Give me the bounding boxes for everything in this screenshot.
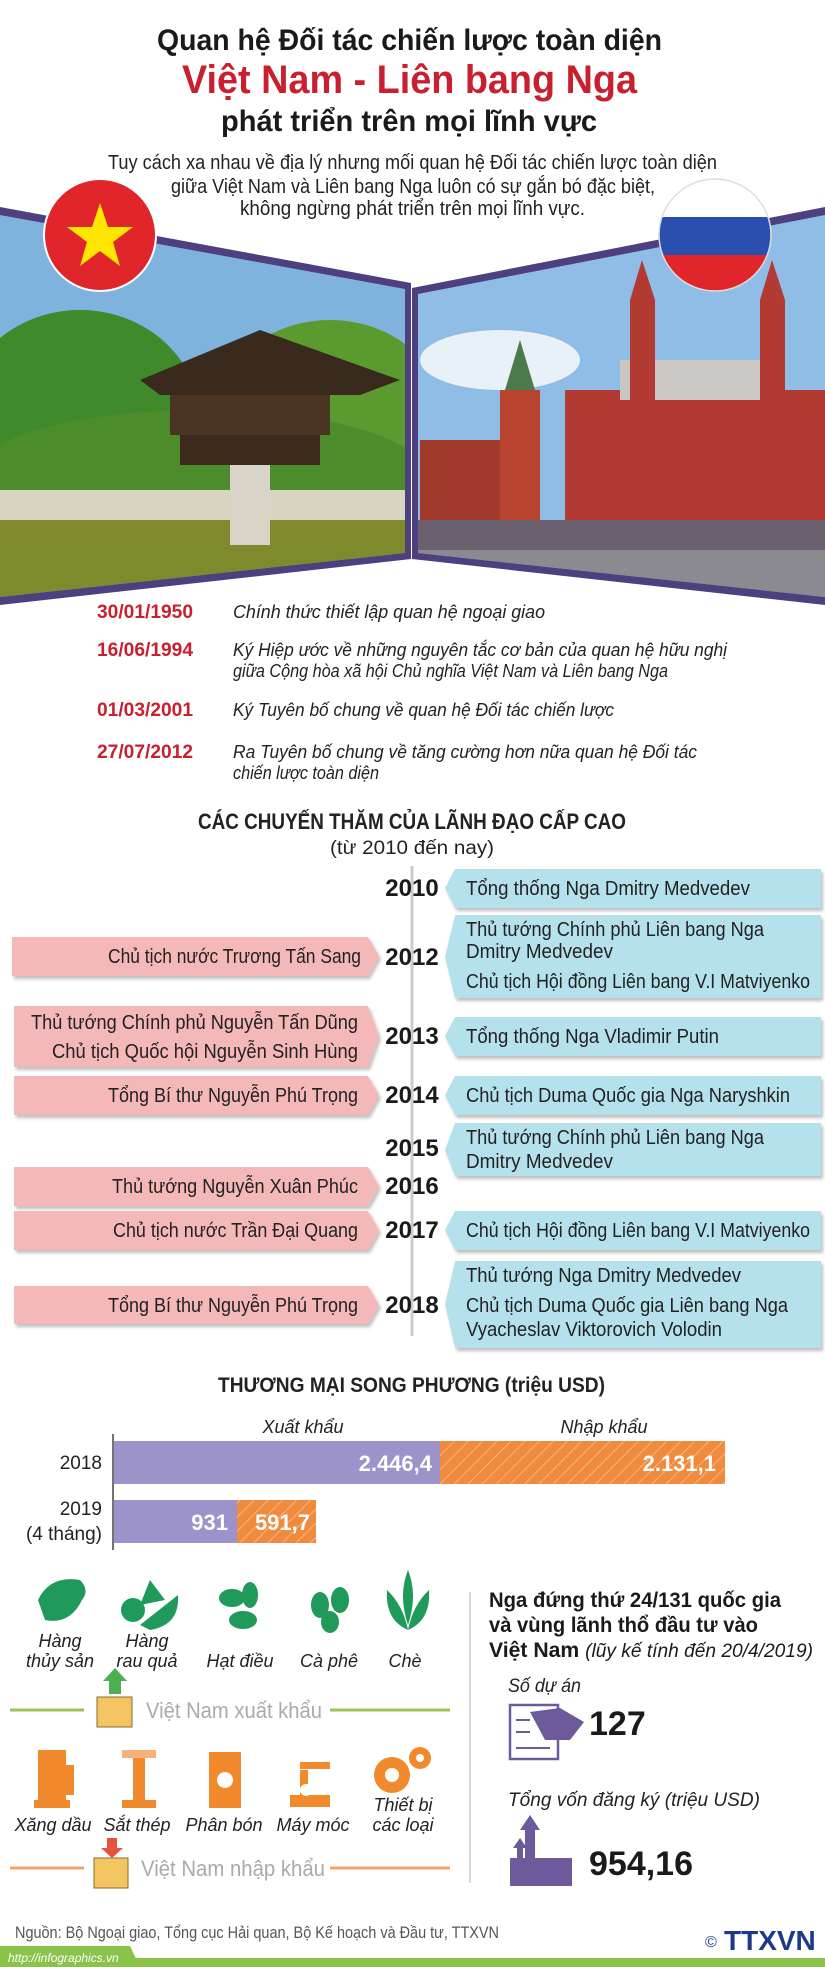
icon: coffee — [311, 1587, 349, 1633]
timeline of milestones: chiến lược toàn diện — [233, 763, 379, 783]
panel: investment: 127 — [589, 1705, 646, 1743]
panel: imports: Thiết bị — [373, 1795, 434, 1815]
visits timeline: Thủ tướng Nga Dmitry Medvedev — [466, 1265, 741, 1287]
panel: exports: Chè — [388, 1651, 422, 1671]
timeline of milestones: Ký Tuyên bố chung về quan hệ Đối tác chiến lược — [233, 700, 614, 720]
visits timeline: Chủ tịch Quốc hội Nguyễn Sinh Hùng — [52, 1040, 358, 1063]
bar chart: trade: (4 tháng) — [26, 1524, 102, 1545]
intro text: giữa Việt Nam và Liên bang Nga luôn có sự gắn bó đặc biệt, — [171, 175, 655, 198]
panel: imports: các loại — [372, 1815, 435, 1835]
panel: investment: Việt Nam (lũy kế tính đến 20/4/2019) — [489, 1639, 813, 1662]
heading: high-level visits: CÁC CHUYẾN THĂM CỦA LÃNH ĐẠO CẤP CAO — [198, 809, 626, 834]
title: Việt Nam - Liên bang Nga — [182, 58, 638, 102]
visits timeline: Thủ tướng Chính phủ Liên bang Nga — [466, 919, 765, 941]
bar chart: trade: 2019 — [60, 1499, 102, 1520]
timeline of milestones — [97, 602, 728, 783]
panel: exports: Hàng — [38, 1631, 82, 1651]
icon: Russia flag — [655, 175, 775, 295]
icon: fuel pump — [34, 1750, 74, 1808]
visits timeline: 2018 — [385, 1292, 439, 1319]
visits timeline: Chủ tịch Duma Quốc gia Nga Naryshkin — [466, 1085, 790, 1107]
bar chart: trade: 591,7 — [255, 1510, 310, 1535]
panel: imports — [10, 1747, 450, 1888]
bar chart: trade: 2.446,4 — [359, 1451, 433, 1476]
icon: robot arm — [290, 1762, 330, 1807]
icon: gears — [374, 1747, 431, 1793]
panel: imports: Xăng dầu — [13, 1815, 92, 1835]
panel: exports: Cà phê — [300, 1651, 358, 1671]
panel: investment: Nga đứng thứ 24/131 quốc gia — [489, 1589, 781, 1612]
photo: Moscow Red Square — [410, 200, 825, 605]
timeline of milestones: 01/03/2001 — [97, 700, 193, 721]
logo: TTXVN: TTXVN — [724, 1925, 816, 1956]
visits timeline: Dmitry Medvedev — [466, 1151, 613, 1173]
visits timeline: Thủ tướng Nguyễn Xuân Phúc — [112, 1175, 358, 1198]
timeline of milestones: 30/01/1950 — [97, 602, 193, 623]
title: phát triển trên mọi lĩnh vực — [221, 105, 597, 138]
intro text: Tuy cách xa nhau về địa lý nhưng mối quan hệ Đối tác chiến lược toàn diện — [108, 152, 717, 174]
icon: money stack with arrows — [510, 1815, 572, 1886]
icon: shrimp — [38, 1579, 86, 1621]
title: Quan hệ Đối tác chiến lược toàn diện — [157, 24, 662, 57]
visits timeline: Vyacheslav Viktorovich Volodin — [466, 1319, 722, 1341]
intro text: không ngừng phát triển trên mọi lĩnh vực. — [240, 198, 585, 220]
panel: exports: thủy sản — [26, 1651, 94, 1671]
visits timeline: Chủ tịch Duma Quốc gia Liên bang Nga — [466, 1295, 789, 1317]
panel: investment: 954,16 — [589, 1845, 693, 1883]
panel: imports: Máy móc — [276, 1815, 350, 1835]
timeline of milestones: 27/07/2012 — [97, 742, 193, 763]
visits timeline: Tổng Bí thư Nguyễn Phú Trọng — [108, 1294, 358, 1317]
icon: fruits — [121, 1580, 178, 1630]
timeline of milestones: Ra Tuyên bố chung về tăng cường hơn nữa quan hệ Đối tác — [233, 742, 697, 762]
panel: investment: Số dự án — [508, 1676, 581, 1697]
panel: exports: Hạt điều — [206, 1651, 274, 1671]
logo: TTXVN: © — [705, 1934, 717, 1951]
icon: cashew — [219, 1582, 258, 1629]
heading: high-level visits: (từ 2010 đến nay) — [330, 838, 494, 859]
visits timeline: Tổng thống Nga Vladimir Putin — [466, 1026, 719, 1048]
timeline of milestones: 16/06/1994 — [97, 640, 193, 661]
panel: exports: rau quả — [116, 1651, 178, 1671]
visits timeline: Tổng thống Nga Dmitry Medvedev — [466, 878, 750, 900]
bar chart: trade: Xuất khẩu — [261, 1417, 344, 1437]
visits timeline: Thủ tướng Chính phủ Nguyễn Tấn Dũng — [31, 1011, 358, 1034]
visits timeline — [12, 866, 821, 1348]
panel: imports: Sắt thép — [103, 1815, 171, 1835]
panel: exports: Việt Nam xuất khẩu — [146, 1698, 322, 1723]
bar chart: trade — [26, 1417, 725, 1550]
title — [157, 24, 662, 138]
panel: exports — [10, 1570, 450, 1727]
icon: Vietnam flag — [44, 179, 156, 291]
visits timeline: Dmitry Medvedev — [466, 941, 613, 963]
source: Nguồn: Bộ Ngoại giao, Tổng cục Hải quan, Bộ Kế hoạch và Đầu tư, TTXVN — [15, 1923, 499, 1942]
bar chart: trade: 2.131,1 — [643, 1451, 716, 1476]
timeline of milestones: Chính thức thiết lập quan hệ ngoại giao — [233, 602, 545, 622]
panel: investment: và vùng lãnh thổ đầu tư vào — [489, 1614, 758, 1637]
visits timeline: Tổng Bí thư Nguyễn Phú Trọng — [108, 1084, 358, 1107]
panel: imports: Việt Nam nhập khẩu — [141, 1856, 325, 1881]
icon: steel beam — [122, 1750, 156, 1808]
footer bar — [0, 1946, 825, 1967]
icon: import box — [94, 1838, 128, 1888]
panel: investment — [489, 1589, 813, 1886]
icon: handshake document — [510, 1705, 584, 1759]
visits timeline: 2014 — [385, 1082, 439, 1109]
bar chart: trade: 931 — [191, 1510, 228, 1535]
visits timeline: 2010 — [385, 875, 439, 902]
visits timeline: Chủ tịch nước Trương Tấn Sang — [108, 946, 361, 968]
footer bar: http://infographics.vn — [8, 1951, 119, 1965]
panel: imports: Phân bón — [185, 1815, 263, 1835]
visits timeline: 2016 — [385, 1173, 439, 1200]
visits timeline: Thủ tướng Chính phủ Liên bang Nga — [466, 1127, 765, 1149]
visits timeline: 2015 — [385, 1135, 439, 1162]
panel: investment: Tổng vốn đăng ký (triệu USD) — [508, 1790, 760, 1811]
icon: export box — [97, 1668, 132, 1727]
visits timeline: 2012 — [385, 944, 439, 971]
photo: One Pillar Pagoda — [0, 200, 440, 605]
visits timeline: Chủ tịch nước Trần Đại Quang — [113, 1220, 358, 1242]
intro text — [108, 152, 717, 220]
icon: tea — [387, 1570, 429, 1630]
bar chart: trade: 2018 — [60, 1453, 102, 1474]
bar chart: trade: Nhập khẩu — [560, 1417, 648, 1437]
heading: high-level visits — [198, 809, 626, 859]
icon: fertilizer bag — [209, 1752, 241, 1808]
visits timeline: 2017 — [385, 1217, 439, 1244]
panel: exports: Hàng — [125, 1631, 169, 1651]
timeline of milestones: giữa Cộng hòa xã hội Chủ nghĩa Việt Nam và Liên bang Nga — [233, 661, 668, 681]
heading: bilateral trade: THƯƠNG MẠI SONG PHƯƠNG (triệu USD) — [218, 1374, 605, 1397]
visits timeline: 2013 — [385, 1023, 439, 1050]
timeline of milestones: Ký Hiệp ước về những nguyên tắc cơ bản của quan hệ hữu nghị — [233, 640, 728, 660]
